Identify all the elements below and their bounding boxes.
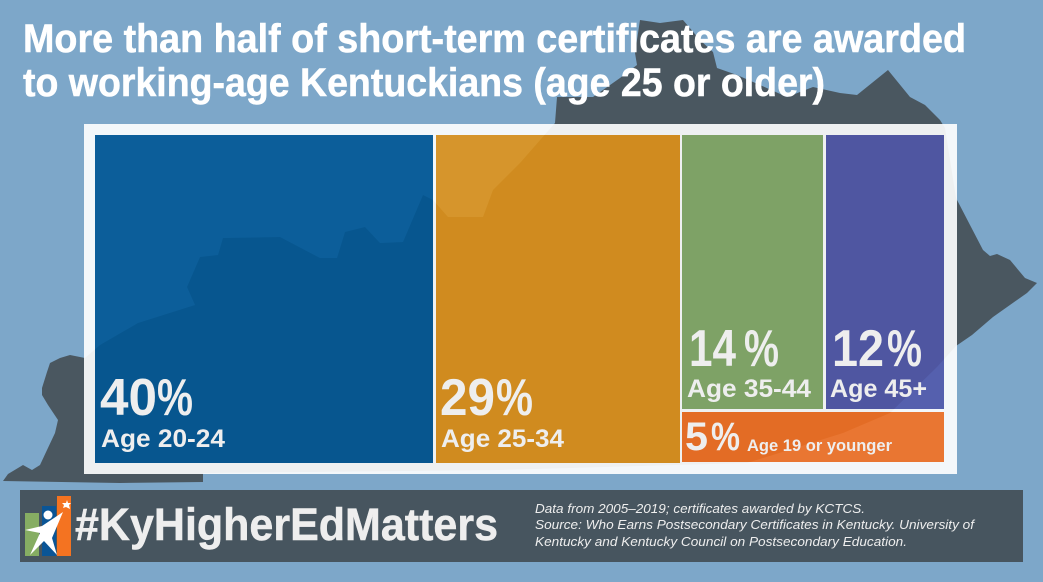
value 14% (689, 320, 779, 378)
value 14%: 14 (689, 320, 736, 378)
value 5% (685, 415, 740, 459)
treemap cell: age 19 or younger (682, 412, 944, 462)
value 40%: 40 (100, 369, 157, 427)
title: to working-age Kentuckians (age 25 or older) (23, 61, 825, 105)
treemap cell: age 35-44 (682, 135, 823, 409)
map of Kentucky silhouette (3, 20, 1037, 483)
value 40%: % (157, 369, 193, 427)
source note (535, 502, 976, 549)
source note: Kentucky and Kentucky Council on Postsecondary Education. (535, 535, 907, 549)
chart frame (84, 124, 957, 474)
icon: logo (25, 496, 71, 556)
label age 35-44: Age 35-44 (687, 375, 811, 403)
value 14%: % (744, 320, 779, 378)
title: More than half of short-term certificates are awarded (23, 17, 966, 61)
value 12%: 12 (832, 320, 884, 378)
value 12%: % (887, 320, 922, 378)
value 29% (440, 369, 533, 427)
footer band (20, 490, 1023, 562)
title (23, 17, 966, 105)
value 12% (832, 320, 922, 378)
treemap cell: age 45+ (826, 135, 944, 409)
value 5%: 5 (685, 415, 708, 459)
source note: Source: Who Earns Postsecondary Certificates in Kentucky. University of (535, 518, 976, 532)
value 29%: % (496, 369, 533, 427)
hashtag: #KyHigherEdMatters (75, 499, 498, 550)
label age 20-24: Age 20-24 (101, 425, 225, 453)
value 40% (100, 369, 193, 427)
source note: Data from 2005–2019; certificates awarded by KCTCS. (535, 502, 865, 516)
label age 25-34: Age 25-34 (441, 425, 564, 453)
treemap cell: age 20-24 (95, 135, 433, 463)
value 5%: % (711, 415, 740, 459)
label age 19 or younger: Age 19 or younger (747, 436, 892, 455)
value 29%: 29 (440, 369, 495, 427)
treemap cell: age 25-34 (436, 135, 680, 463)
label age 45+: Age 45+ (830, 375, 927, 403)
